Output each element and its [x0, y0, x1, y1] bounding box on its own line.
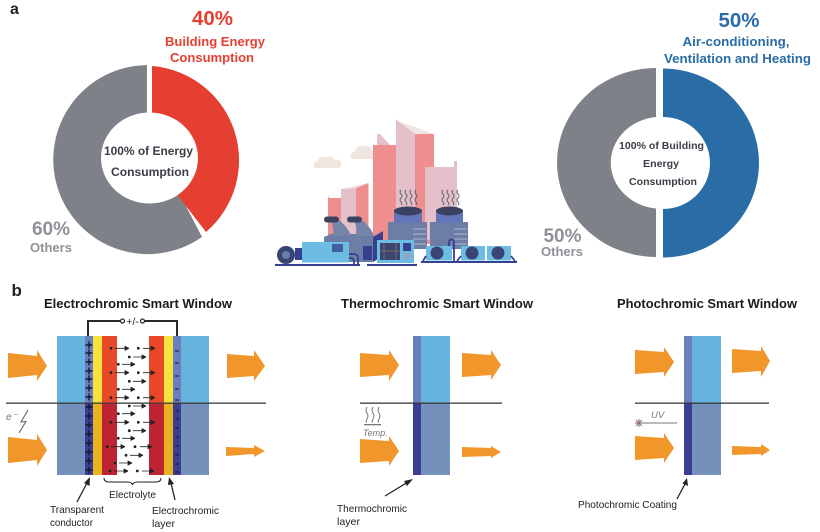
callout: 60% others: Others	[30, 240, 72, 255]
donut hole	[101, 112, 198, 204]
cooling towers	[388, 206, 468, 249]
central control unit	[367, 240, 417, 266]
heading: Photochromic Smart Window	[617, 296, 798, 311]
donut centre label: Consumption	[629, 176, 697, 188]
circuit wire and voltage source: +/-	[126, 316, 139, 328]
brace: electrolyte	[104, 478, 161, 485]
callout: 50% HVAC	[664, 9, 811, 66]
donut centre label	[619, 140, 704, 188]
callout: 50% HVAC: Ventilation and Heating	[664, 51, 811, 66]
callout: 50% others	[541, 226, 583, 259]
label arrow: transparent conductor: Transparent	[50, 504, 104, 516]
icon: electron lightning	[6, 410, 28, 433]
divider line	[635, 402, 769, 404]
electrolyte ions	[106, 346, 155, 473]
callout: 50% others: Others	[541, 244, 583, 259]
positive charges	[86, 342, 92, 474]
segment: building energy 40%	[152, 66, 239, 232]
icon: UV ray: UV	[651, 410, 666, 421]
label arrow: transparent conductor: conductor	[50, 517, 93, 529]
segment: others 60%	[53, 65, 202, 254]
panel: electrochromic smart window	[6, 296, 266, 530]
panel label a: a	[10, 1, 19, 18]
label arrow: electrochromic layer: layer	[152, 518, 176, 530]
illustration: city buildings and HVAC equipment	[275, 119, 517, 266]
callout: 40% building energy: Building Energy	[165, 34, 266, 49]
icon: heat waves	[400, 190, 459, 205]
label arrow: electrochromic layer: Electrochromic	[152, 505, 219, 517]
glass panes	[684, 336, 721, 475]
arrows: incoming and transmitted light	[360, 350, 501, 466]
donut chart: energy consumption	[30, 7, 266, 255]
arrows: incoming and transmitted light	[635, 346, 770, 463]
icon: temperature: Temp.	[363, 428, 388, 438]
label arrow: electrochromic layer	[152, 477, 219, 530]
icon: clouds	[314, 146, 378, 168]
panel: thermochromic smart window	[337, 296, 534, 528]
air handling unit with ducts	[324, 216, 383, 262]
panel label b: b	[12, 281, 22, 300]
label: electrolyte: Electrolyte	[109, 489, 156, 501]
segment: others 50%	[557, 68, 656, 257]
donut centre label: 100% of Energy	[104, 146, 194, 158]
circuit wire and voltage source	[88, 316, 177, 336]
callout: 40% building energy: 40%	[192, 7, 233, 30]
label arrow: transparent conductor	[50, 477, 104, 529]
divider line	[6, 402, 266, 404]
label arrow: photochromic coating: Photochromic Coating	[578, 499, 677, 511]
donut chart: building energy consumption	[541, 9, 811, 259]
callout: 60% others: 60%	[32, 219, 70, 240]
arrows: incoming and transmitted light	[8, 350, 265, 466]
callout: 60% others	[30, 219, 72, 255]
callout: 40% building energy: Consumption	[170, 50, 254, 65]
glass panes	[57, 336, 209, 475]
panel: photochromic smart window	[578, 296, 798, 511]
glass panes	[413, 336, 450, 475]
buildings	[328, 119, 457, 248]
callout: 50% HVAC: 50%	[718, 9, 760, 32]
donut centre label	[104, 146, 194, 179]
label arrow: thermochromic layer: Thermochromic	[337, 503, 407, 515]
segment: HVAC 50%	[663, 68, 759, 258]
donut centre label: Consumption	[111, 167, 189, 179]
icon: electron lightning: e⁻	[6, 411, 19, 423]
callout: 50% others: 50%	[543, 226, 582, 247]
donut centre label: Energy	[643, 158, 679, 170]
blue blower unit	[275, 242, 360, 266]
divider line	[360, 402, 502, 404]
callout: 50% HVAC: Air-conditioning,	[682, 34, 790, 49]
heading: Electrochromic Smart Window	[44, 296, 233, 311]
callout: 40% building energy	[165, 7, 266, 65]
negative charges	[175, 351, 179, 472]
label arrow: thermochromic layer: layer	[337, 516, 361, 528]
donut centre label: 100% of Building	[619, 140, 704, 152]
icon: temperature	[363, 407, 388, 438]
label arrow: thermochromic layer	[337, 479, 413, 528]
heading: Thermochromic Smart Window	[341, 296, 534, 311]
icon: UV ray	[635, 410, 677, 427]
label arrow: photochromic coating	[578, 478, 688, 511]
condenser units	[421, 240, 517, 263]
